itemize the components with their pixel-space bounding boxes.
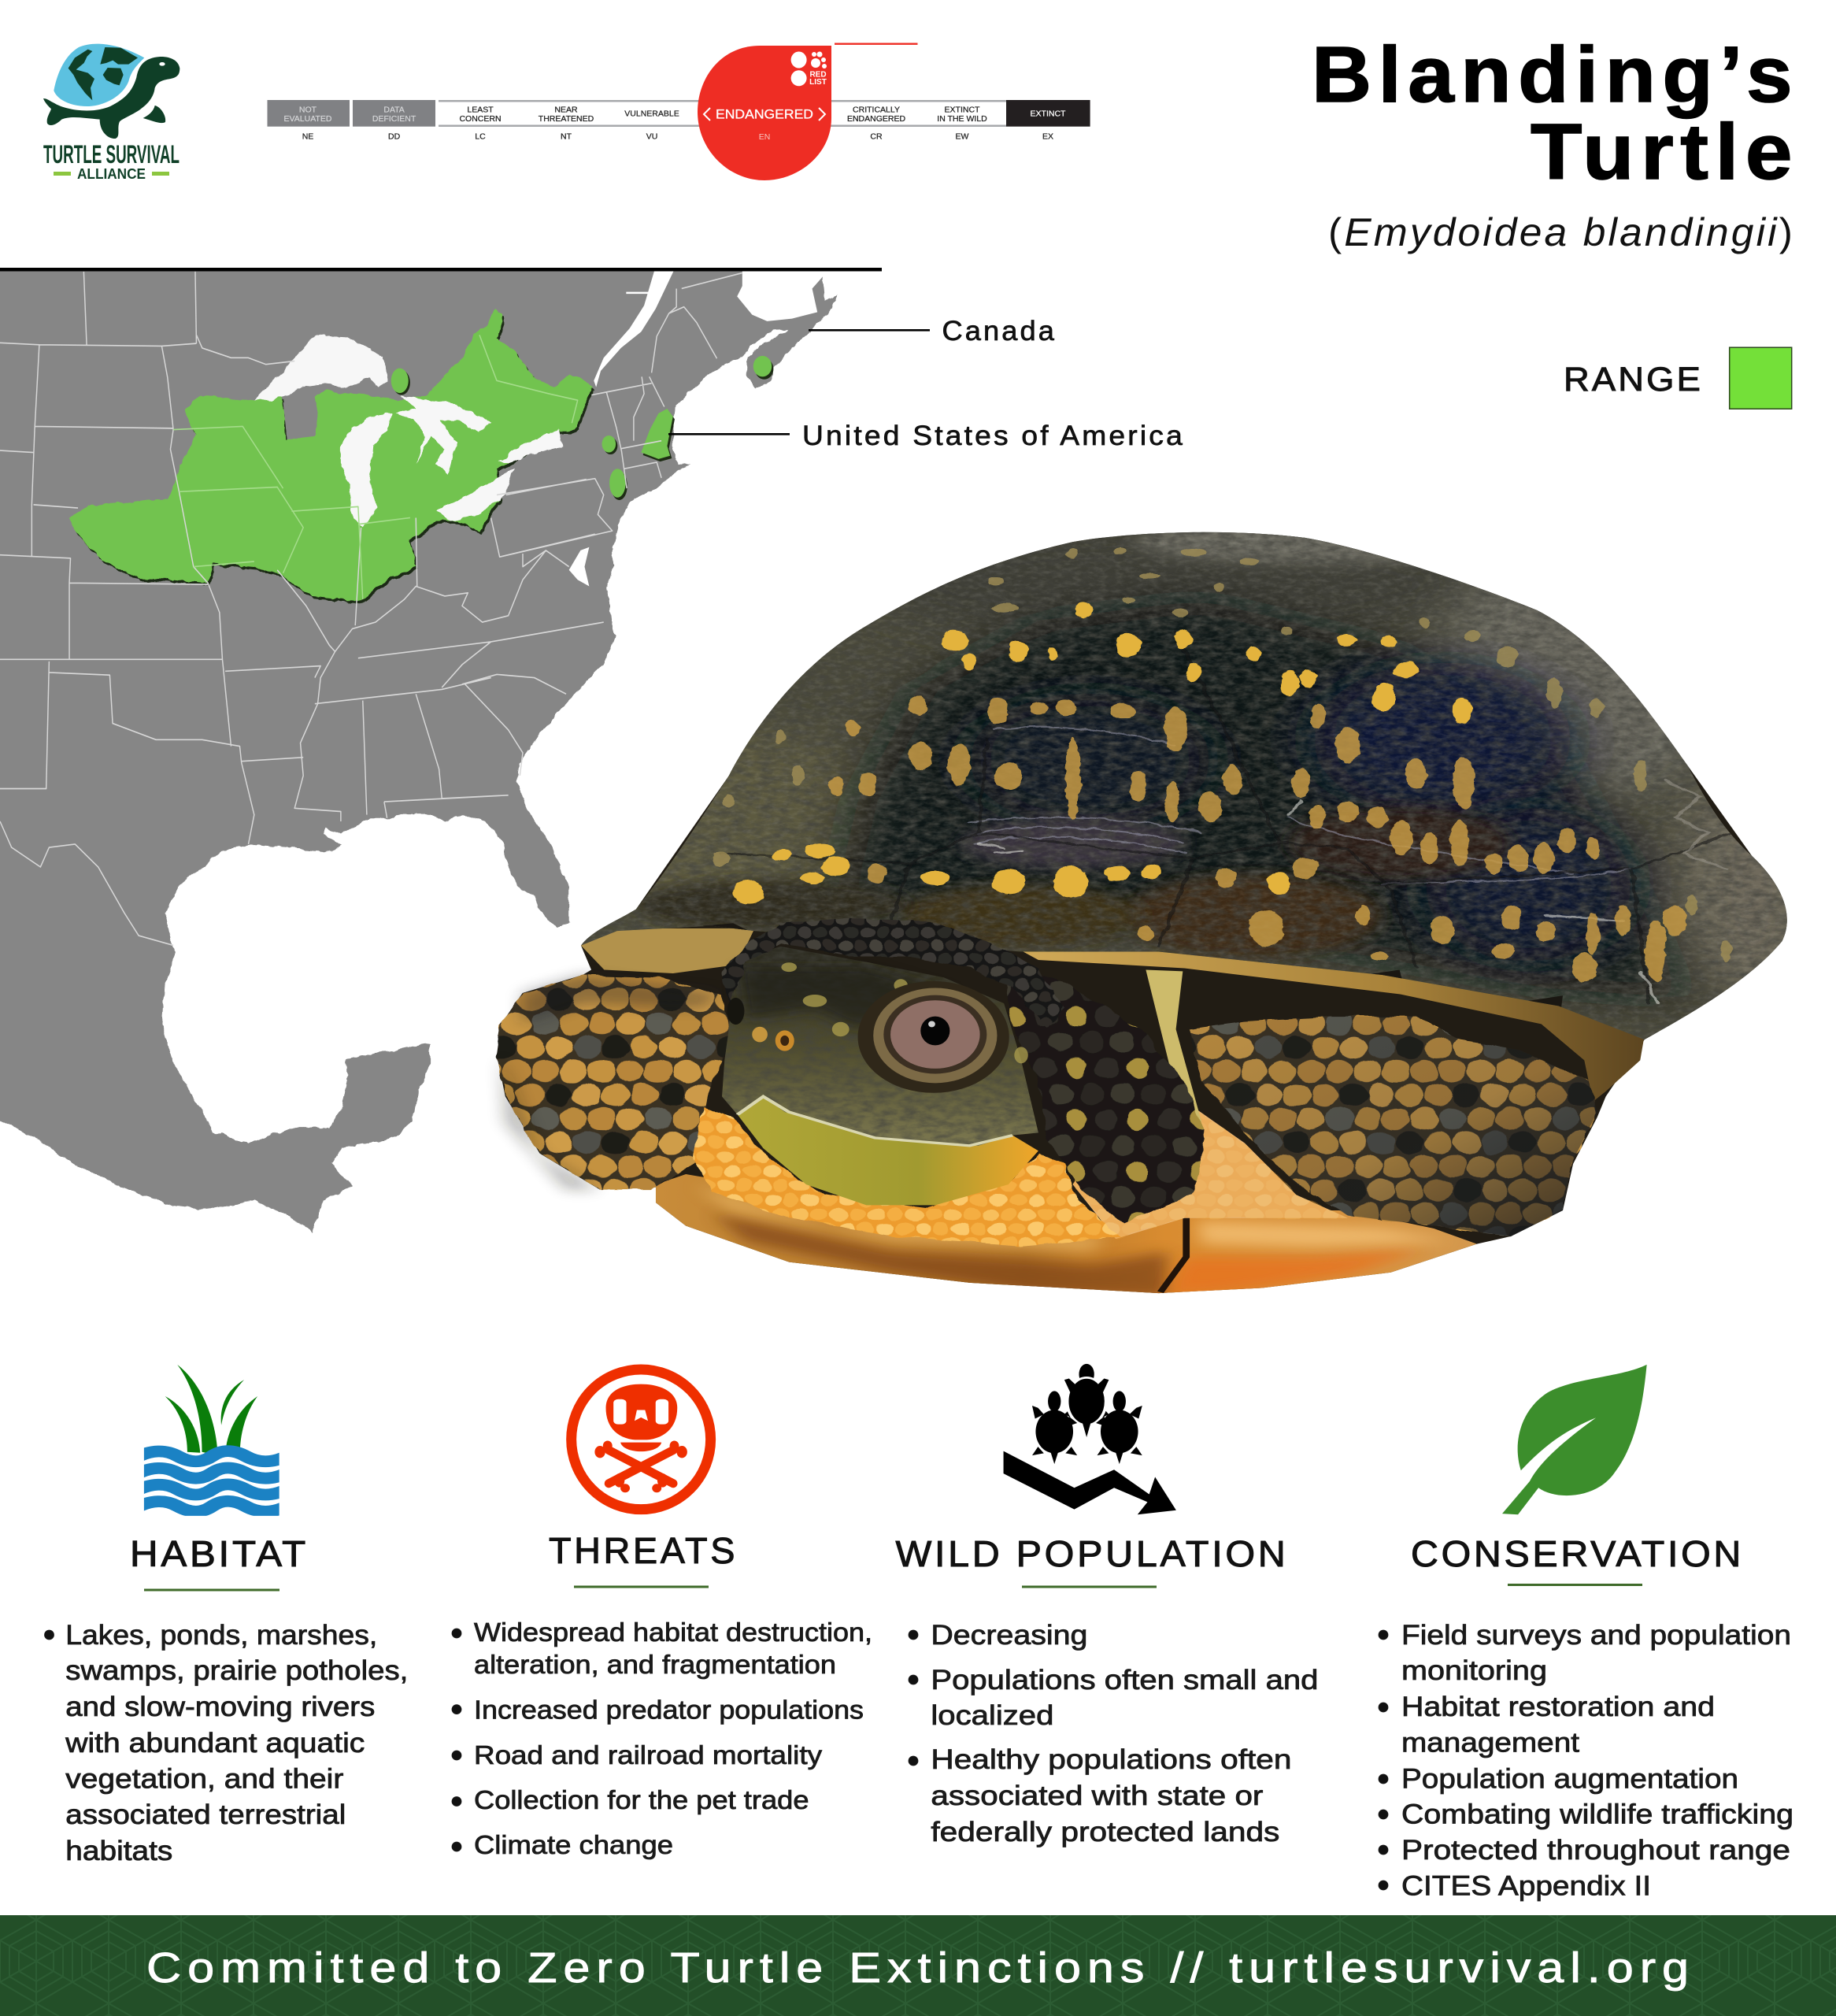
white mask above rule (0, 244, 945, 269)
status bar: LC (475, 132, 486, 142)
title: Blanding’s (1312, 31, 1799, 119)
growth rings and scute seams (720, 631, 1734, 1003)
status bar: CRITICALLY (853, 106, 900, 115)
status bar: DEFICIENT (372, 114, 416, 124)
logo wordmark: TURTLE SURVIVAL (43, 140, 180, 169)
range area (69, 309, 773, 603)
land (0, 254, 838, 1232)
legend: range: RANGE (1564, 361, 1703, 398)
wild population list (909, 1620, 1318, 1847)
panel: habitat (44, 1365, 408, 1866)
heading: wild population: WILD POPULATION (896, 1533, 1288, 1574)
shell texture (565, 522, 1804, 1050)
status bar: CR (870, 132, 883, 142)
red endangered marker: LIST (809, 78, 827, 87)
map of eastern North America with range (0, 254, 838, 1232)
conservation list: monitoring (1401, 1655, 1547, 1686)
status bar: VU (646, 132, 657, 142)
yellow spots (733, 602, 1471, 905)
status bar: NOT (299, 106, 317, 115)
habitat text: swamps, prairie potholes, (65, 1655, 408, 1686)
conservation list: Combating wildlife trafficking (1401, 1799, 1793, 1830)
status bar: EVALUATED (284, 114, 332, 124)
neck (1004, 967, 1206, 1223)
status bar: NEAR (554, 106, 578, 115)
marginal scutes (581, 928, 1645, 1122)
threats list: Climate change (474, 1830, 673, 1859)
conservation list: Field surveys and population (1401, 1620, 1791, 1651)
icon: reeds and water (135, 1365, 287, 1511)
status bar: NE (302, 132, 313, 142)
red endangered marker: EN (759, 132, 770, 142)
state and provincial borders (0, 272, 742, 945)
icon: leaf (1502, 1365, 1647, 1514)
crown scales (722, 918, 1064, 1029)
icon: turtles and declining arrow (1004, 1364, 1176, 1514)
conservation list: Population augmentation (1401, 1764, 1738, 1794)
footer banner (0, 1915, 1836, 2016)
title (1312, 31, 1799, 196)
head (722, 947, 1038, 1146)
status bar: EXTINCT (1031, 109, 1066, 119)
logo: Turtle Survival Alliance: ALLIANCE (77, 166, 146, 182)
wild population list: Healthy populations often (931, 1744, 1291, 1775)
shell (565, 522, 1830, 1050)
habitat text (44, 1620, 408, 1866)
status bar: EW (956, 132, 969, 142)
status bar: LEAST (467, 106, 494, 115)
turtle photo illustration (497, 522, 1830, 1299)
status bar: CONCERN (459, 114, 502, 124)
threats list: Increased predator populations (474, 1695, 864, 1725)
panel: threats (452, 1369, 872, 1859)
right foreleg (1189, 1017, 1597, 1236)
status bar (268, 100, 1090, 142)
scientific name: (Emydoidea blandingii ) (1328, 210, 1795, 254)
status bar: VULNERABLE (624, 109, 679, 119)
left foreleg (497, 975, 733, 1190)
heading: threats: THREATS (549, 1530, 738, 1571)
top rule (0, 268, 882, 271)
conservation list: Protected throughout range (1401, 1835, 1790, 1866)
wild population list: federally protected lands (931, 1817, 1279, 1847)
icon: skull and crossbones (572, 1369, 711, 1510)
red endangered marker: RED (809, 71, 827, 79)
status bar: DD (388, 132, 401, 142)
red endangered marker (698, 43, 918, 180)
status bar: ENDANGERED (847, 114, 905, 124)
conservation list (1379, 1620, 1793, 1901)
wild population list: associated with state or (931, 1781, 1264, 1811)
title: Turtle (1531, 108, 1799, 196)
status bar: EXTINCT (945, 106, 980, 115)
threats list: Road and railroad mortality (474, 1740, 823, 1770)
great lakes (254, 335, 563, 528)
panel: wild population (896, 1364, 1318, 1847)
status bar: IN THE WILD (937, 114, 987, 124)
legend: range (1564, 347, 1792, 409)
threats list: Widespread habitat destruction, (474, 1618, 872, 1647)
red endangered marker: ENDANGERED (716, 107, 813, 121)
chin (738, 1096, 1038, 1205)
wild population list: Populations often small and (931, 1665, 1318, 1695)
logo icon: turtle with globe shell (43, 44, 180, 139)
status bar: DATA (383, 106, 405, 115)
flesh under limbs (1073, 1107, 1348, 1239)
habitat text: and slow-moving rivers (65, 1692, 375, 1722)
threats list: Collection for the pet trade (474, 1785, 809, 1814)
threats list: alteration, and fragmentation (474, 1650, 836, 1679)
eye (858, 981, 1009, 1093)
wild population list: localized (931, 1700, 1053, 1731)
habitat text: habitats (65, 1836, 172, 1866)
habitat text: associated terrestrial (65, 1799, 346, 1830)
conservation list: management (1401, 1728, 1579, 1758)
label: United States of America: United States of America (802, 421, 1185, 451)
status bar: NT (561, 132, 572, 142)
plastron (656, 1174, 1477, 1299)
heading: conservation: CONSERVATION (1411, 1533, 1744, 1574)
label: Canada: Canada (942, 316, 1057, 346)
threats list (452, 1618, 872, 1859)
footer tagline: Committed to Zero Turtle Extinctions // turtlesurvival.org (146, 1944, 1695, 1992)
habitat text: with abundant aquatic (65, 1728, 365, 1758)
status bar: THREATENED (539, 114, 594, 124)
throat (693, 1107, 1120, 1247)
status bar: EX (1042, 132, 1053, 142)
habitat text: vegetation, and their (65, 1764, 344, 1795)
habitat text: Lakes, ponds, marshes, (65, 1620, 377, 1651)
panel: conservation (1379, 1365, 1793, 1901)
silhouette base (497, 538, 1782, 1293)
IUCN red list status scale (268, 43, 1090, 180)
conservation list: CITES Appendix II (1401, 1871, 1651, 1901)
conservation list: Habitat restoration and (1401, 1692, 1715, 1722)
wild population list: Decreasing (931, 1620, 1087, 1651)
logo: Turtle Survival Alliance (43, 44, 180, 182)
heading: habitat: HABITAT (130, 1533, 309, 1574)
